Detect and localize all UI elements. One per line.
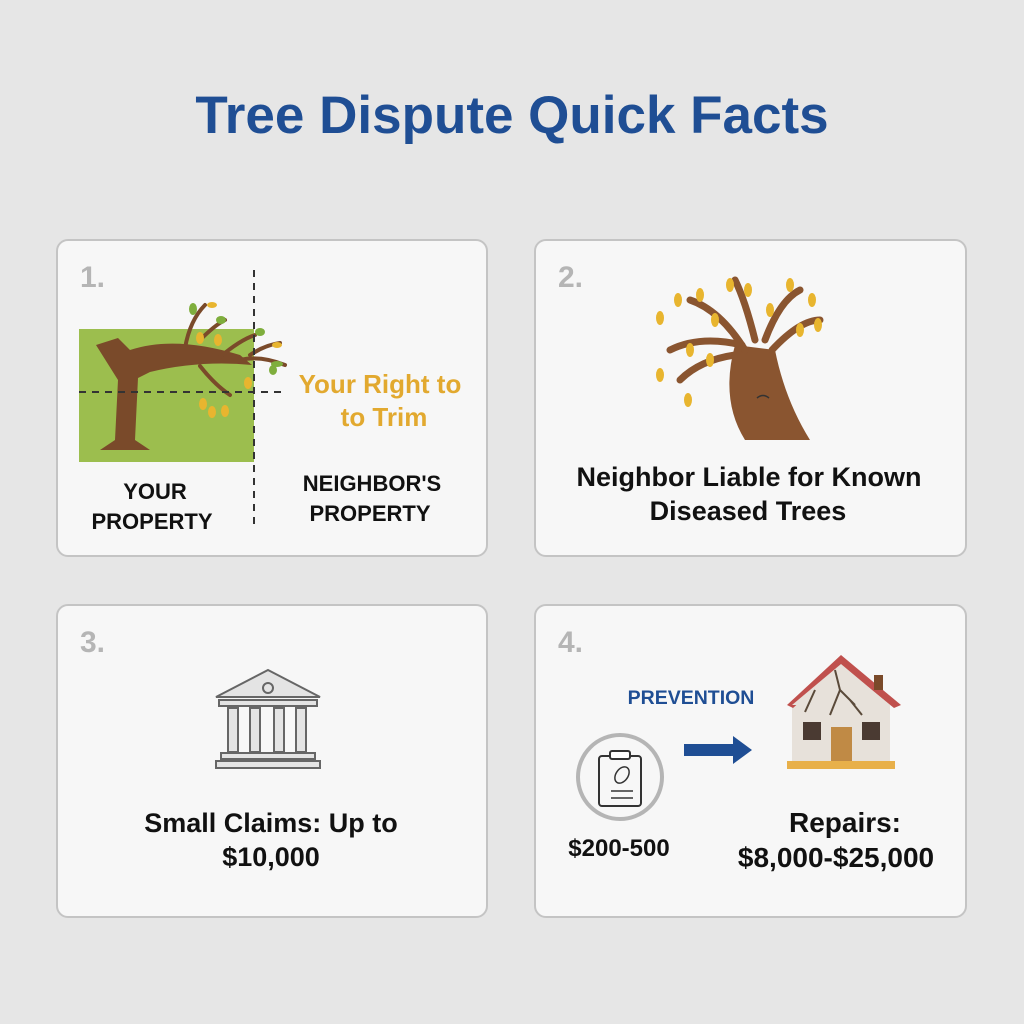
- arrow: [684, 736, 752, 764]
- icon: courthouse: [216, 670, 320, 768]
- label: your right to trim: to Trim: [341, 402, 427, 432]
- property line dashed: [253, 270, 255, 528]
- icon: diseased tree: [656, 278, 822, 440]
- label: neighbor's property: NEIGHBOR'S: [303, 471, 441, 496]
- title: Tree Dispute Quick Facts: [195, 86, 829, 145]
- label: your right to trim: Your Right to: [299, 369, 461, 399]
- number 2: 2.: [558, 261, 583, 294]
- text: neighbor liable: Diseased Trees: [650, 496, 846, 526]
- label: prevention: PREVENTION: [628, 687, 754, 709]
- text: repairs cost: $8,000-$25,000: [738, 842, 934, 873]
- panel: diseased trees: [535, 240, 966, 556]
- icon: leaning tree: [96, 302, 285, 450]
- label: your property: YOUR: [123, 479, 187, 504]
- text: prevention cost: $200-500: [568, 835, 670, 862]
- icon: damaged house: [787, 655, 901, 769]
- text: repairs cost: Repairs:: [789, 807, 901, 838]
- panel: small claims: [57, 605, 487, 917]
- panel: your right to trim: [57, 240, 487, 556]
- text: neighbor liable: Neighbor Liable for Known: [576, 462, 922, 492]
- icon: inspection clipboard: [578, 735, 662, 819]
- your property green area: [79, 329, 254, 462]
- label: neighbor's property: PROPERTY: [309, 501, 431, 526]
- text: small claims: Small Claims: Up to: [144, 808, 398, 838]
- number 3: 3.: [80, 626, 105, 659]
- text: small claims: $10,000: [222, 842, 320, 872]
- panel: prevention vs repairs: [535, 605, 966, 917]
- label: your property: PROPERTY: [91, 509, 213, 534]
- number 4: 4.: [558, 626, 583, 659]
- number 1: 1.: [80, 261, 105, 294]
